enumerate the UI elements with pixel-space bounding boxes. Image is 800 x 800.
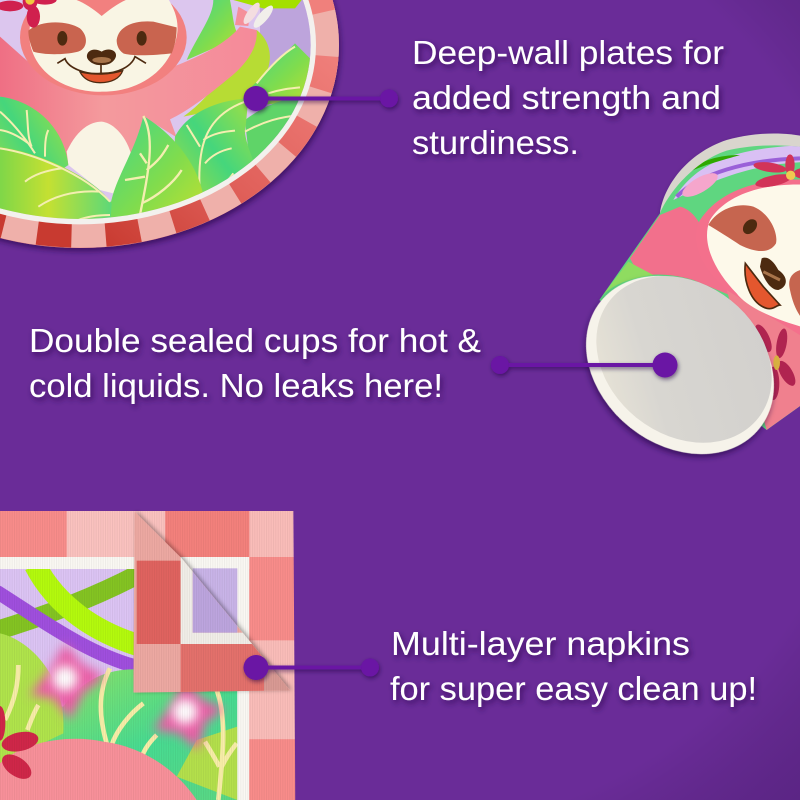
- connector: plate: [244, 86, 398, 111]
- connector: cup: [491, 352, 678, 378]
- panel: plate: [0, 0, 347, 248]
- plate artwork: sloth in leaves: [0, 0, 311, 219]
- cup rim: [660, 134, 800, 213]
- sloth head: [20, 0, 187, 95]
- text: cups: cold liquids. No leaks here!: [29, 368, 443, 405]
- copyright mark: ©BirthdayGalore.com: [67, 222, 129, 230]
- text: napkins: for super easy clean up!: [390, 671, 757, 708]
- text: napkins: [390, 626, 757, 708]
- leaves: [0, 47, 302, 227]
- sloth belly: [67, 122, 133, 193]
- napkin base: [0, 511, 297, 800]
- text: plates: sturdiness.: [412, 125, 579, 162]
- napkin artwork: [0, 565, 237, 800]
- cup body: [593, 130, 800, 437]
- napkin checker border: [0, 511, 296, 800]
- blurred flowers: [30, 643, 225, 750]
- sloth claws: [235, 2, 273, 28]
- sloth body and arm: [0, 27, 257, 165]
- text: cups: Double sealed cups for hot &: [29, 323, 481, 360]
- flower on sloth head: [0, 0, 57, 28]
- text: plates: Deep-wall plates for: [412, 35, 724, 72]
- text: napkins: Multi-layer napkins: [391, 626, 690, 663]
- cup base: [551, 239, 800, 491]
- text: cups: [29, 323, 481, 405]
- text: plates: [412, 35, 724, 162]
- panel: napkin: [0, 510, 297, 800]
- plate rim: [0, 0, 339, 248]
- connector: napkin: [244, 655, 379, 680]
- panel: cup: [582, 134, 800, 460]
- text: plates: added strength and: [412, 80, 721, 117]
- napkin folded corner: [133, 510, 294, 697]
